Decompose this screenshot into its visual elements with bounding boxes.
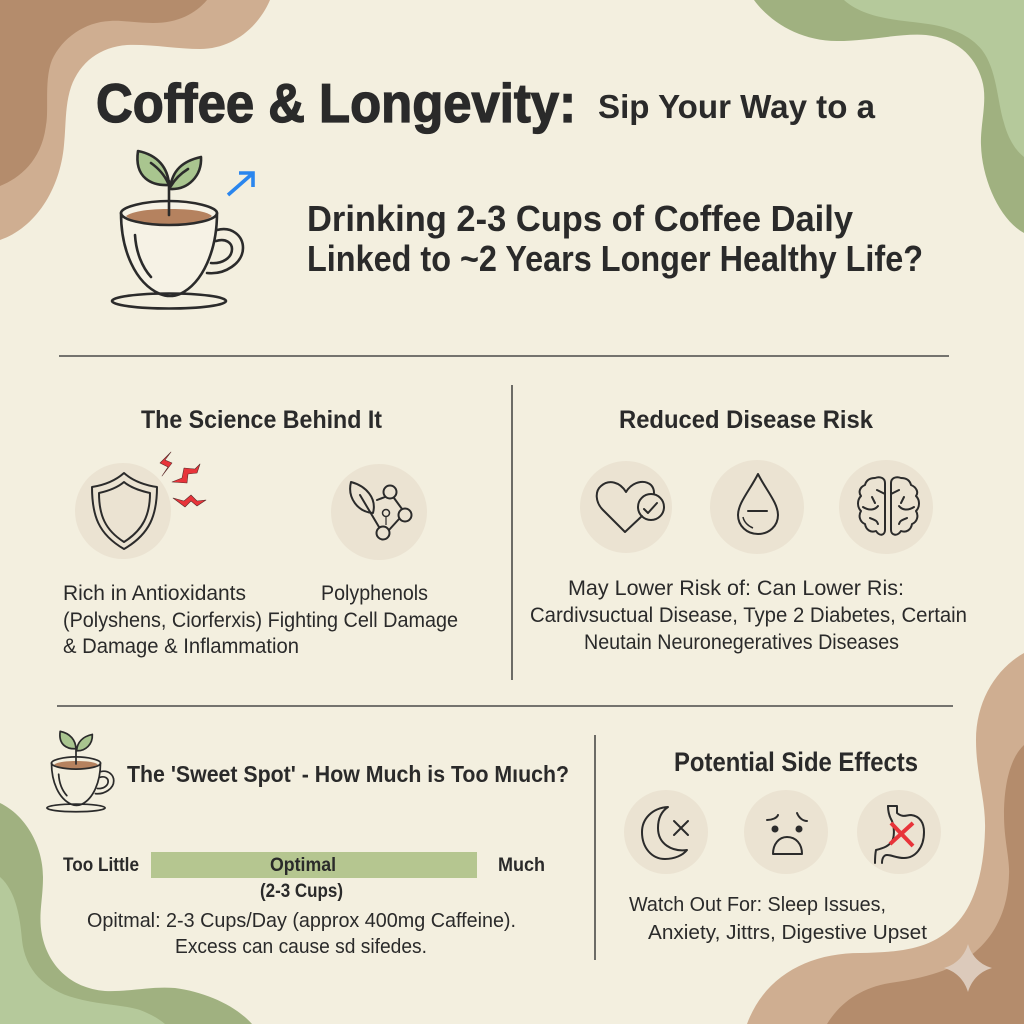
icon: heart with check <box>580 461 672 553</box>
decorative blob: bottom left <box>0 803 252 1024</box>
text: watch out for: Watch Out For: Sleep Issues, <box>629 894 886 916</box>
icon: shield <box>75 463 171 559</box>
panel: sweet spot <box>47 731 569 958</box>
icon: polyphenol leaf and molecule <box>331 464 427 560</box>
text: watch out for <box>629 894 927 944</box>
icon: moon with x <box>624 790 708 874</box>
subtitle: Linked to ~2 Years Longer Healthy Life? <box>307 238 923 279</box>
text: disease risk <box>530 577 967 654</box>
icon: stomach with red x <box>857 790 941 874</box>
subtitle <box>307 198 923 279</box>
text: antioxidants: Polyphenols <box>321 582 428 605</box>
heading: potential side effects: Potential Side Effects <box>674 747 918 777</box>
decorative blob: top left <box>0 0 270 240</box>
text: optimal intake: Opitmal: 2-3 Cups/Day (approx 400mg Caffeine). <box>87 910 516 932</box>
bar chart: caffeine range <box>63 852 545 902</box>
icon: free radical sparks <box>160 452 206 507</box>
text: antioxidants: & Damage & Inflammation <box>63 635 299 658</box>
panel: potential side effects <box>624 747 941 944</box>
text: disease risk: Cardivsuctual Disease, Type 2 Diabetes, Certain <box>530 604 967 627</box>
arrow: upward trend <box>228 173 253 195</box>
title: Coffee & Longevity: <box>96 72 576 134</box>
heading: sweet spot: The 'Sweet Spot' - How Much is Too Mıuch? <box>127 761 569 787</box>
panel: the science behind it <box>63 406 458 658</box>
text: disease risk: May Lower Risk of: Can Lower Ris: <box>568 577 904 600</box>
text: antioxidants: (Polyshens, Ciorferxis) Fighting Cell Damage <box>63 609 458 632</box>
bar chart: caffeine range: Much <box>498 855 545 876</box>
bar chart: caffeine range: (2-3 Cups) <box>260 881 343 902</box>
text: optimal intake <box>87 910 516 958</box>
icon: sparkle <box>944 944 992 992</box>
subtitle: Drinking 2-3 Cups of Coffee Daily <box>307 198 853 239</box>
decorative blob: bottom right <box>747 653 1024 1024</box>
decorative blob: top right <box>754 0 1024 233</box>
icon: brain <box>839 460 933 554</box>
icon: coffee cup with sprout <box>112 151 243 308</box>
heading: reduced disease risk: Reduced Disease Risk <box>619 406 873 434</box>
text: watch out for: Anxiety, Jittrs, Digestive Upset <box>648 922 927 944</box>
text: antioxidants <box>63 582 458 658</box>
title: Sip Your Way to a <box>598 88 876 125</box>
text: antioxidants: Rich in Antioxidants <box>63 582 246 605</box>
icon: anxious face <box>744 790 828 874</box>
heading: the science behind it: The Science Behind It <box>141 406 383 434</box>
bar chart: caffeine range: Too Little <box>63 855 139 876</box>
icon: small coffee cup with sprout <box>47 731 114 812</box>
text: optimal intake: Excess can cause sd sifedes. <box>175 936 427 958</box>
panel: reduced disease risk <box>530 406 967 654</box>
bar chart: caffeine range: Optimal <box>270 855 336 876</box>
icon: blood sugar drop <box>710 460 804 554</box>
title <box>96 72 876 134</box>
text: disease risk: Neutain Neuronegeratives Diseases <box>584 631 899 654</box>
